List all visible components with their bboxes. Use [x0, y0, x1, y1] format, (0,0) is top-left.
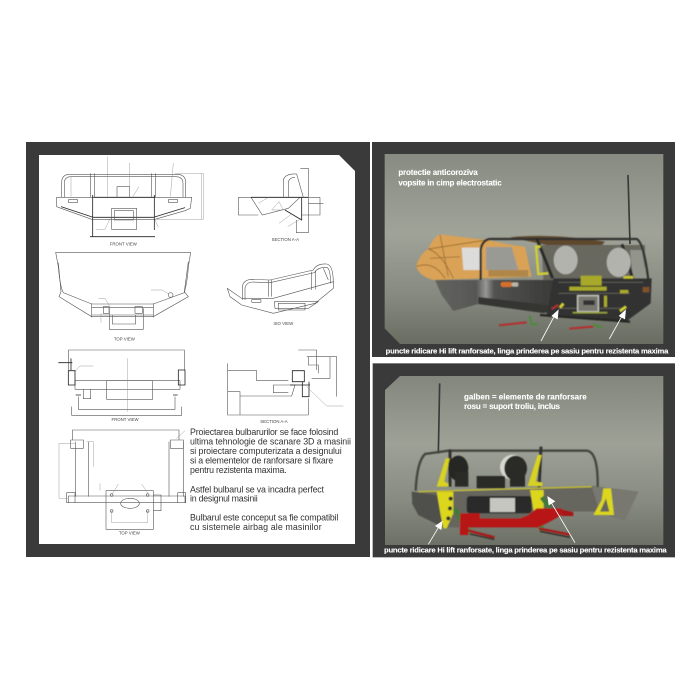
- wing of bumper: [435, 280, 553, 313]
- text block: description: [190, 427, 351, 532]
- drawing: isometric view: ISO VIEW: [273, 321, 294, 326]
- lamps: [448, 456, 468, 481]
- caption: lift points: puncte ridicare Hi lift ranforsate, linga prinderea pe sasiu pentru rezistenta maxima: [384, 546, 667, 555]
- drawing: section view: [228, 350, 343, 424]
- yellow braces upper: [437, 458, 450, 487]
- caption: lift points: puncte ridicare Hi lift ranforsate, linga prinderea pe sasiu pentru rezistenta maxima: [386, 346, 669, 355]
- heading: colour legend: [464, 392, 587, 411]
- illustration: bullbar cutaway: [412, 447, 638, 539]
- drawing: top view: [56, 252, 191, 341]
- drawing: section view: SECTION A-A: [260, 419, 288, 424]
- red winch cradle: [460, 508, 562, 535]
- text block: description: Astfel bulbarul se va incadra perfect: [190, 484, 325, 494]
- panel background: [385, 154, 663, 344]
- winch: [578, 296, 598, 312]
- drawing: lower top view: TOP VIEW: [119, 530, 141, 535]
- arrow: lift point left: [541, 309, 559, 341]
- arrow: left lift point: [428, 521, 443, 544]
- text block: description: Bulbarul este conceput sa fie compatibil: [190, 512, 338, 522]
- antenna: [628, 175, 630, 244]
- text block: description: Proiectarea bulbarurilor se face folosind: [190, 427, 338, 437]
- heading: colour legend: rosu = suport troliu, inclus: [464, 402, 561, 411]
- text block: description: si proiectare computerizata a designului: [190, 446, 342, 456]
- arrow: lift point right: [609, 309, 626, 339]
- drawing: rear front view: [58, 350, 185, 422]
- white drawing sheet: [39, 155, 355, 544]
- upper drawings: [56, 157, 333, 341]
- badge: [643, 287, 649, 292]
- inner tank: [467, 496, 532, 513]
- heading: protection note: vopsite in cimp electrostatic: [398, 178, 502, 187]
- text block: description: ultima tehnologie de scanare 3D a masinii: [190, 437, 351, 447]
- inner frame behind lamps: [542, 245, 645, 280]
- drawing: top view: TOP VIEW: [114, 336, 136, 341]
- text block: description: pentru rezistenta maxima.: [190, 465, 287, 475]
- panel: corrosion protection render: [372, 142, 675, 357]
- drawing: front view: FRONT VIEW: [110, 242, 138, 247]
- text block: description: si a elementelor de ranforsare si fixare: [190, 456, 333, 466]
- vehicle body, orange wireframe: [416, 234, 532, 280]
- drawing: rear front view: FRONT VIEW: [111, 417, 139, 422]
- red lift points: [540, 315, 630, 322]
- heading: protection note: [398, 168, 502, 187]
- drawing: section A-A: SECTION A-A: [272, 237, 299, 242]
- arrow: chassis mount: [547, 496, 575, 543]
- bar tube: [416, 451, 598, 491]
- drawing: section A-A: [238, 168, 323, 242]
- lower drawings: [58, 350, 343, 535]
- panel background: [385, 376, 663, 545]
- spot lamps: [554, 246, 578, 274]
- green brackets: [455, 497, 550, 533]
- text block: description: in designul masinii: [190, 494, 258, 504]
- panel: reinforcement render: [373, 363, 675, 557]
- yellow reinforcements: [536, 247, 548, 274]
- heading: colour legend: galben = elemente de ranforsare: [464, 392, 587, 401]
- bumper tray: [412, 486, 638, 527]
- drawing: isometric view: [227, 264, 333, 326]
- bumper centre: [547, 278, 652, 321]
- text block: description: cu sistemele airbag ale masinilor: [190, 522, 322, 532]
- drawing: front view: [57, 157, 203, 247]
- panel: technical drawings: [26, 142, 370, 557]
- heading: protection note: protectie anticoroziva: [398, 168, 478, 177]
- yellow braces lower: [437, 492, 453, 528]
- antenna: [438, 383, 440, 453]
- illustration: vehicle and bullbar, front view: [416, 234, 652, 329]
- drawing: lower top view: [59, 430, 186, 535]
- bar tubes: [481, 239, 649, 283]
